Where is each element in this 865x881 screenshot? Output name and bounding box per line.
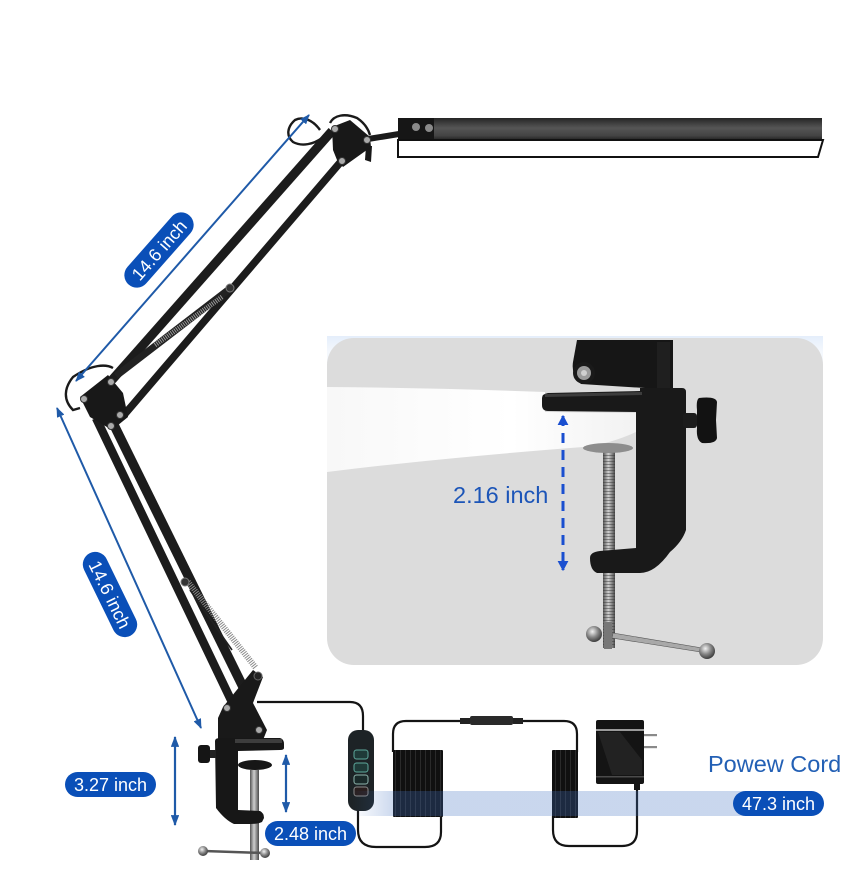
label: 2.16 inch: 2.16 inch [453, 482, 548, 508]
side knob [683, 398, 717, 443]
pill: 2.48 inch: 2.48 inch [274, 824, 347, 844]
dashed dimension arrow [562, 416, 564, 570]
elbow joint plate [80, 375, 128, 430]
pill: lower arm 14.6 inch [79, 548, 141, 641]
upper arm bars [112, 131, 344, 415]
right cord coil [552, 750, 578, 818]
cables [257, 702, 637, 847]
base C clamp [215, 738, 284, 824]
power adapter [596, 720, 657, 790]
arrow: upper arm length [76, 115, 309, 381]
label: Powew Cord: Powew Cord [708, 751, 841, 777]
base bracket [218, 670, 267, 740]
upper arm mount [573, 340, 673, 388]
inset panel: desk clamp detail [327, 336, 823, 665]
desk table top [327, 387, 636, 472]
pill: 3.27 inch: 3.27 inch [74, 775, 147, 795]
clamp screw with handle [583, 443, 715, 659]
arrow: clamp opening [285, 755, 287, 812]
pill: 47.3 inch [733, 791, 824, 816]
cable connector [460, 716, 523, 725]
base clamp screw and handle [198, 760, 272, 860]
left cord coil [393, 750, 443, 817]
pill: lower arm 14.6 inch: 14.6 inch [85, 558, 135, 632]
lamp head light bar [398, 118, 823, 157]
pill: 2.48 inch [265, 821, 356, 846]
pill: upper arm 14.6 inch: 14.6 inch [128, 216, 191, 284]
inline dimmer controller [348, 730, 374, 811]
cable rings at joints [66, 115, 370, 410]
arrow: clamp height [174, 737, 176, 825]
cord length highlight band [352, 791, 752, 816]
pill: 3.27 inch [65, 772, 156, 797]
arrow: lower arm length [57, 408, 201, 728]
lower arm bars [96, 418, 248, 700]
lamp assembly [66, 115, 823, 860]
base knob [198, 745, 216, 763]
top joint plate [332, 120, 399, 167]
cable run with coils and adapter [257, 702, 752, 847]
upper arm spring [116, 284, 234, 376]
C clamp body [542, 388, 686, 573]
lower arm spring [181, 578, 256, 668]
pill: 47.3 inch: 47.3 inch [742, 794, 815, 814]
pill: upper arm 14.6 inch [119, 207, 199, 293]
panel background [327, 336, 823, 665]
